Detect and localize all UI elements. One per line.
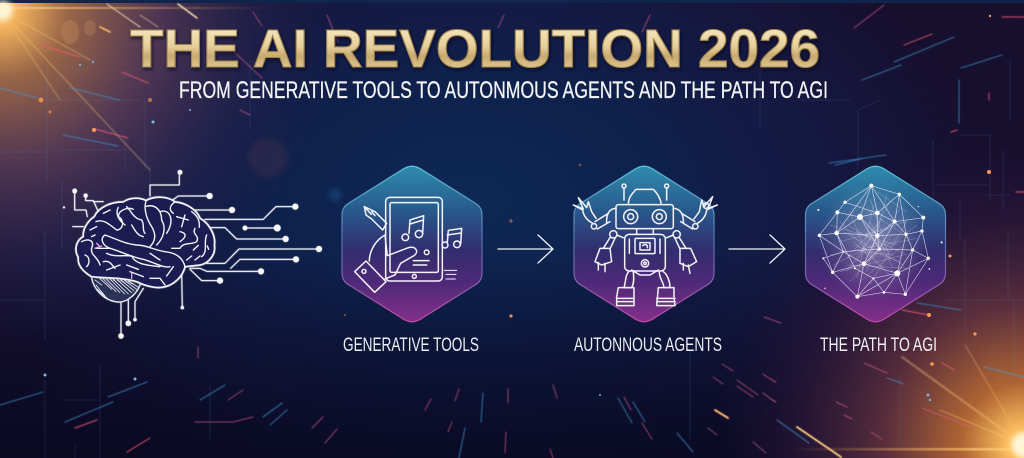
hexagon background: path to AGI	[806, 166, 946, 322]
icon: neural network sphere	[817, 183, 943, 300]
label: the path to AGI: THE PATH TO AGI	[820, 335, 937, 356]
arrow: agents to AGI	[729, 235, 785, 263]
arrow: tools to agents	[498, 235, 553, 263]
icon: robot	[573, 184, 717, 306]
hexagon background: generative tools	[342, 166, 482, 322]
panel: the path to AGI	[806, 166, 946, 322]
icon: hand with tablet, pen and music notes	[355, 197, 462, 292]
panel: autonomous agents	[573, 166, 717, 322]
label: autonomous agents: AUTONNOUS AGENTS	[574, 335, 722, 356]
title: THE AI REVOLUTION 2026	[130, 19, 820, 79]
hexagon background: autonomous agents	[574, 166, 714, 322]
label: generative tools: GENERATIVE TOOLS	[343, 335, 479, 356]
icon: circuit brain	[63, 170, 322, 339]
panel: generative tools	[342, 166, 482, 322]
